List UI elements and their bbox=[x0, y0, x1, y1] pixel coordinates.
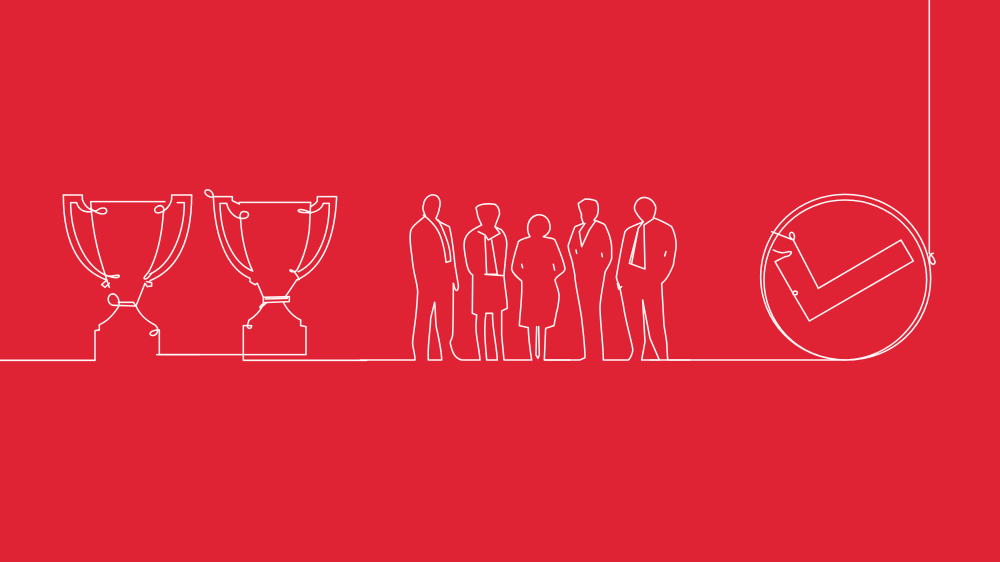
check outline bbox=[773, 240, 913, 321]
figure: central woman bbox=[512, 215, 570, 360]
figure: man with arm folded bbox=[545, 197, 690, 360]
figure: man in suit bbox=[360, 195, 480, 360]
icon: second trophy bbox=[157, 190, 367, 360]
figures: group of five people bbox=[360, 195, 570, 360]
icon: first trophy bbox=[0, 195, 200, 360]
double circle bbox=[761, 194, 931, 360]
figure: man in tie bbox=[617, 218, 666, 360]
baseline into circle bbox=[650, 358, 847, 362]
hanging line with loop bbox=[929, 0, 935, 264]
figure: woman with collar bbox=[464, 204, 532, 360]
icon: circled checkmark bbox=[650, 0, 935, 360]
